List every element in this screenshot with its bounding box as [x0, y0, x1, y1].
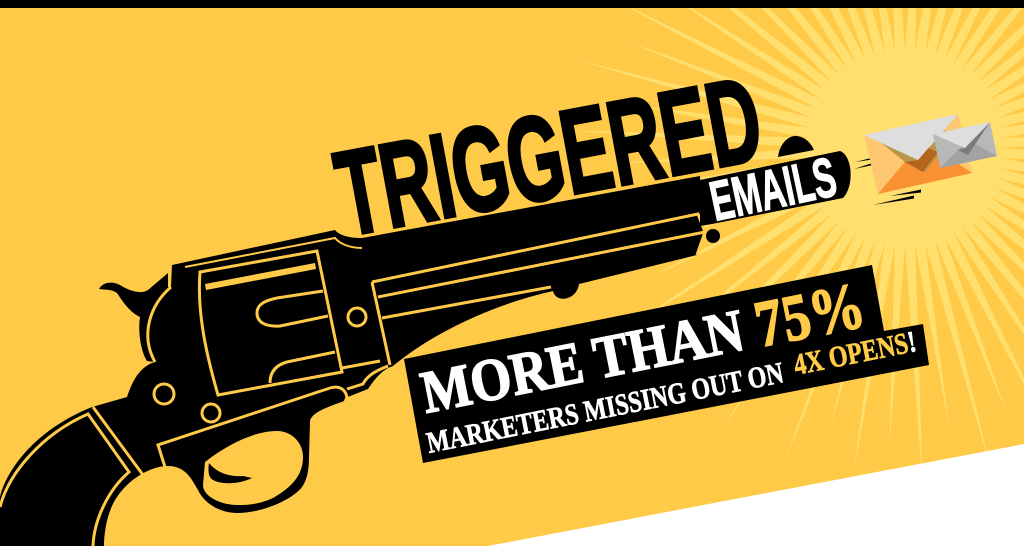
subhead: 4X opens: 4X OPENS! — [791, 325, 919, 382]
sun disc — [810, 53, 1000, 243]
subhead: marketers missing out: MARKETERS MISSING OUT ON — [424, 356, 787, 460]
title: TRIGGERED: TRIGGERED — [326, 51, 771, 261]
trigger guard opening — [203, 431, 303, 505]
cylinder thick bar — [205, 263, 316, 290]
muzzle sight bump — [778, 136, 814, 157]
top black bar — [0, 0, 1024, 8]
headline: MORE THAN: MORE THAN — [416, 297, 749, 426]
label: EMAILS: EMAILS — [704, 145, 842, 233]
callout banner — [404, 265, 929, 463]
white lower section — [488, 444, 1024, 546]
speed lines — [854, 154, 921, 205]
sunburst rays — [539, 0, 1024, 517]
gun silhouette — [0, 176, 705, 546]
barrel front sight — [706, 229, 720, 243]
stat: 75%: 75% — [749, 269, 871, 362]
icon: small envelope — [933, 122, 997, 168]
banner background — [404, 265, 929, 463]
gun line details — [0, 214, 705, 546]
barrel label pill — [700, 151, 851, 226]
trigger — [208, 463, 252, 483]
revolver — [0, 176, 720, 546]
icon: large envelope — [864, 114, 972, 194]
